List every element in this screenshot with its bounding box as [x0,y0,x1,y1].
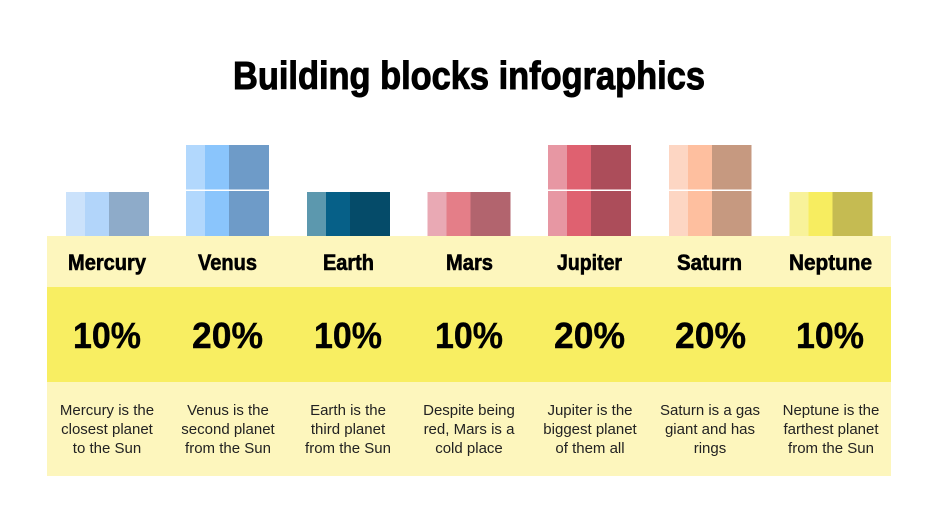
descriptions: Venus is the [187,402,269,419]
planet names: Mercury [68,250,147,275]
descriptions: from the Sun [788,440,874,457]
descriptions: Neptune is the [783,402,879,419]
block: Mars [428,192,510,236]
descriptions: giant and has [665,421,755,438]
descriptions: of them all [555,440,625,457]
descriptions: cold place [435,440,503,457]
descriptions: from the Sun [305,440,391,457]
block: Venus [186,145,269,236]
percentages: 20% [192,315,263,356]
block: Neptune [790,192,872,236]
descriptions: third planet [311,421,386,438]
percentages: 10% [314,315,382,356]
descriptions: Despite being [423,402,515,419]
descriptions: red, Mars is a [424,421,515,438]
panel: table bands [47,236,891,476]
block: Jupiter [548,145,631,236]
percentages: 20% [554,315,625,356]
planet names: Neptune [789,250,872,275]
descriptions: biggest planet [543,421,638,438]
block: Mercury [66,192,149,236]
descriptions [60,402,879,457]
planet names: Mars [446,250,493,275]
descriptions: Earth is the [310,402,386,419]
percentages: 10% [73,315,141,356]
block: Saturn [669,145,752,236]
block: Earth [307,192,390,236]
planet names: Venus [198,250,257,275]
descriptions: second planet [181,421,276,438]
descriptions: farthest planet [783,421,879,438]
descriptions: Jupiter is the [547,402,633,419]
descriptions: rings [694,440,726,457]
planet names: Jupiter [557,250,622,275]
descriptions: to the Sun [73,440,141,457]
descriptions: closest planet [61,421,154,438]
planet names: Saturn [677,250,742,275]
percentages: 10% [796,315,864,356]
title: Building blocks infographics [233,55,705,98]
percentages: 10% [435,315,503,356]
percentages [73,315,864,356]
percentages: 20% [675,315,746,356]
descriptions: Mercury is the [60,402,154,419]
planet names: Earth [323,250,374,275]
planet names [68,250,872,275]
descriptions: from the Sun [185,440,271,457]
descriptions: Saturn is a gas [660,402,760,419]
